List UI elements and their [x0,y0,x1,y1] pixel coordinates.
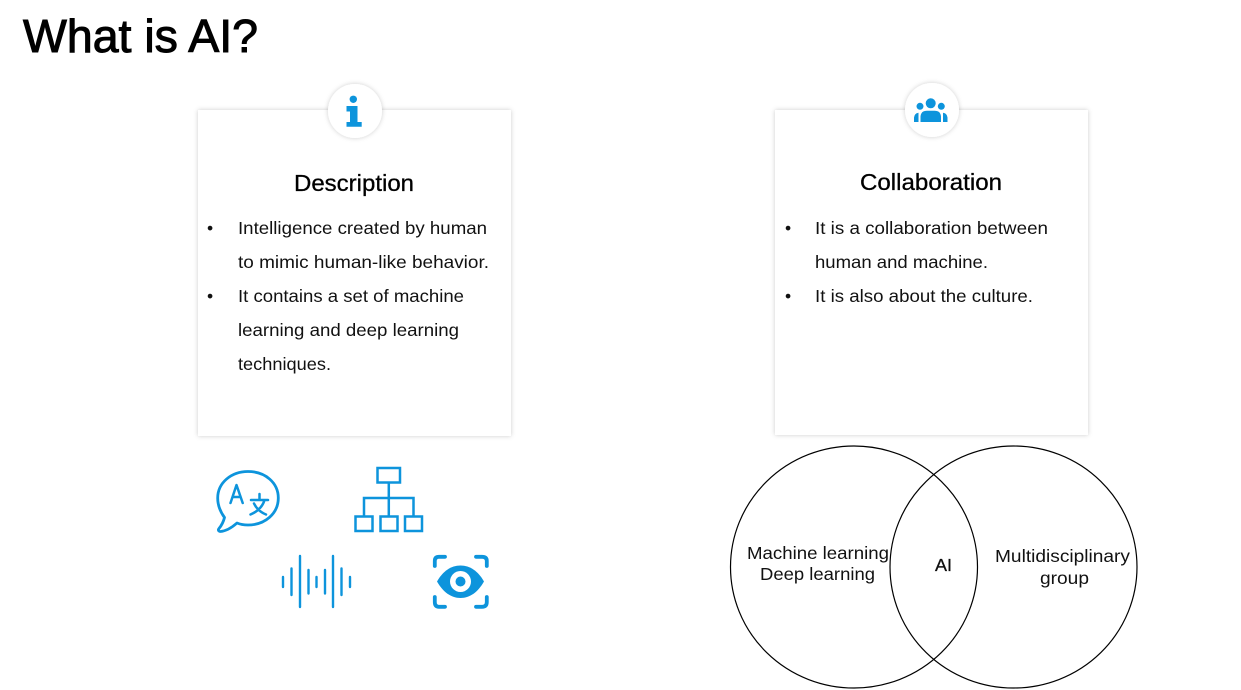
heading: description: Description [294,170,414,196]
venn diagram [730,446,1137,688]
venn circle: right [890,446,1137,688]
text block: collaboration bullets: It is a collaboration between [815,218,1048,238]
icon: info [328,84,382,138]
icon: eye scan [435,557,487,607]
text block: description bullets: • [207,286,213,306]
venn label: machine learning, deep learning: Machine learning [747,543,889,563]
text block: description bullets: • [207,218,213,238]
venn label: multidisciplinary group: Multidisciplinary [995,546,1130,566]
title: What is AI? [23,10,258,62]
text block: collaboration bullets: It is also about the culture. [815,286,1033,306]
text block: collaboration bullets: • [785,218,791,238]
venn label: multidisciplinary group [995,546,1130,588]
venn label: AI: AI [935,555,952,575]
panel: collaboration [775,83,1088,435]
venn label: multidisciplinary group: group [1040,568,1089,588]
icon: translate bubble [218,472,278,532]
text block: description bullets: techniques. [238,354,331,374]
text block: collaboration bullets [785,218,1048,306]
text block: collaboration bullets: human and machine. [815,252,988,272]
panel: description [198,84,511,436]
icon: people [905,83,959,137]
text block: collaboration bullets: • [785,286,791,306]
venn label: machine learning, deep learning: Deep learning [760,564,875,584]
text block: description bullets: learning and deep learning [238,320,459,340]
heading: collaboration: Collaboration [860,169,1002,195]
text block: description bullets [207,218,489,374]
text block: description bullets: It contains a set of machine [238,286,464,306]
text block: description bullets: to mimic human-like behavior. [238,252,489,272]
icon: sound wave [283,556,350,607]
icon: org chart [356,468,422,531]
venn circle: left [730,446,978,688]
text block: description bullets: Intelligence created by human [238,218,487,238]
venn label: machine learning, deep learning [747,543,889,584]
